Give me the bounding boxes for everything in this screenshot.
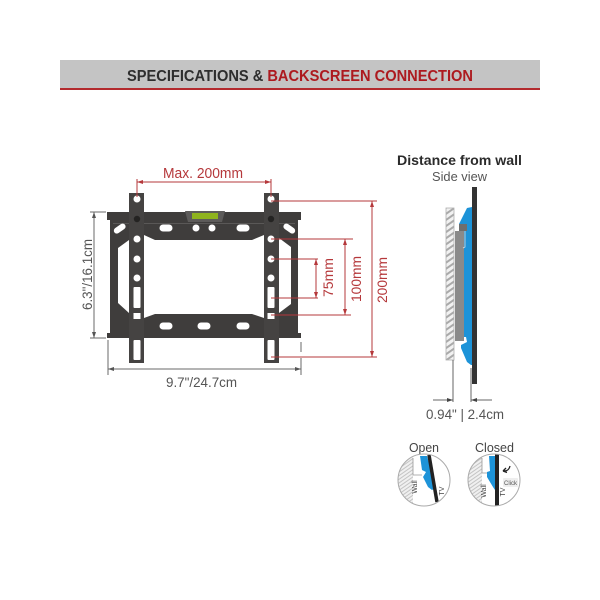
dimension: max 200mm xyxy=(137,166,271,197)
wall section xyxy=(446,208,454,360)
subheading: side view: Side view xyxy=(432,170,488,184)
dimension: bracket height xyxy=(79,212,106,338)
side view diagram xyxy=(446,187,477,384)
dimension: 200mm: 200mm xyxy=(374,257,390,303)
dimension: distance from wall xyxy=(426,360,504,422)
blue bracket xyxy=(459,207,472,365)
dimension: 75mm: 75mm xyxy=(320,258,336,297)
icon: open position xyxy=(396,452,450,508)
title: SPECIFICATIONS & BACKSCREEN CONNECTION xyxy=(127,68,473,85)
heading: distance from wall: Distance from wall xyxy=(397,153,522,168)
dimension: bracket height: 6.3"/16.1cm xyxy=(79,239,95,310)
dimension: 100mm: 100mm xyxy=(348,256,364,302)
label: closed: Closed xyxy=(475,440,514,455)
TV panel xyxy=(472,187,477,384)
icon: closed position: TV xyxy=(500,487,507,496)
icon: closed position: Wall xyxy=(481,484,488,498)
dimension: bracket width xyxy=(108,340,301,390)
click arrow xyxy=(503,466,510,472)
grey wall plate xyxy=(455,231,464,341)
dimension: 200mm xyxy=(271,201,390,357)
dimension: 100mm xyxy=(271,239,364,315)
spirit level xyxy=(185,211,225,222)
dimension: bracket width: 9.7"/24.7cm xyxy=(166,374,237,390)
dimension: max 200mm: Max. 200mm xyxy=(163,166,243,182)
dimension: distance from wall: 0.94" | 2.4cm xyxy=(426,406,504,422)
wall bracket front view xyxy=(107,193,301,363)
click label: Click xyxy=(504,481,518,487)
label: open: Open xyxy=(409,440,439,455)
dimension: 75mm xyxy=(271,258,336,298)
icon: open position: TV xyxy=(439,486,446,495)
header band xyxy=(60,60,540,90)
icon: closed position xyxy=(466,452,520,508)
icon: open position: Wall xyxy=(412,480,419,494)
